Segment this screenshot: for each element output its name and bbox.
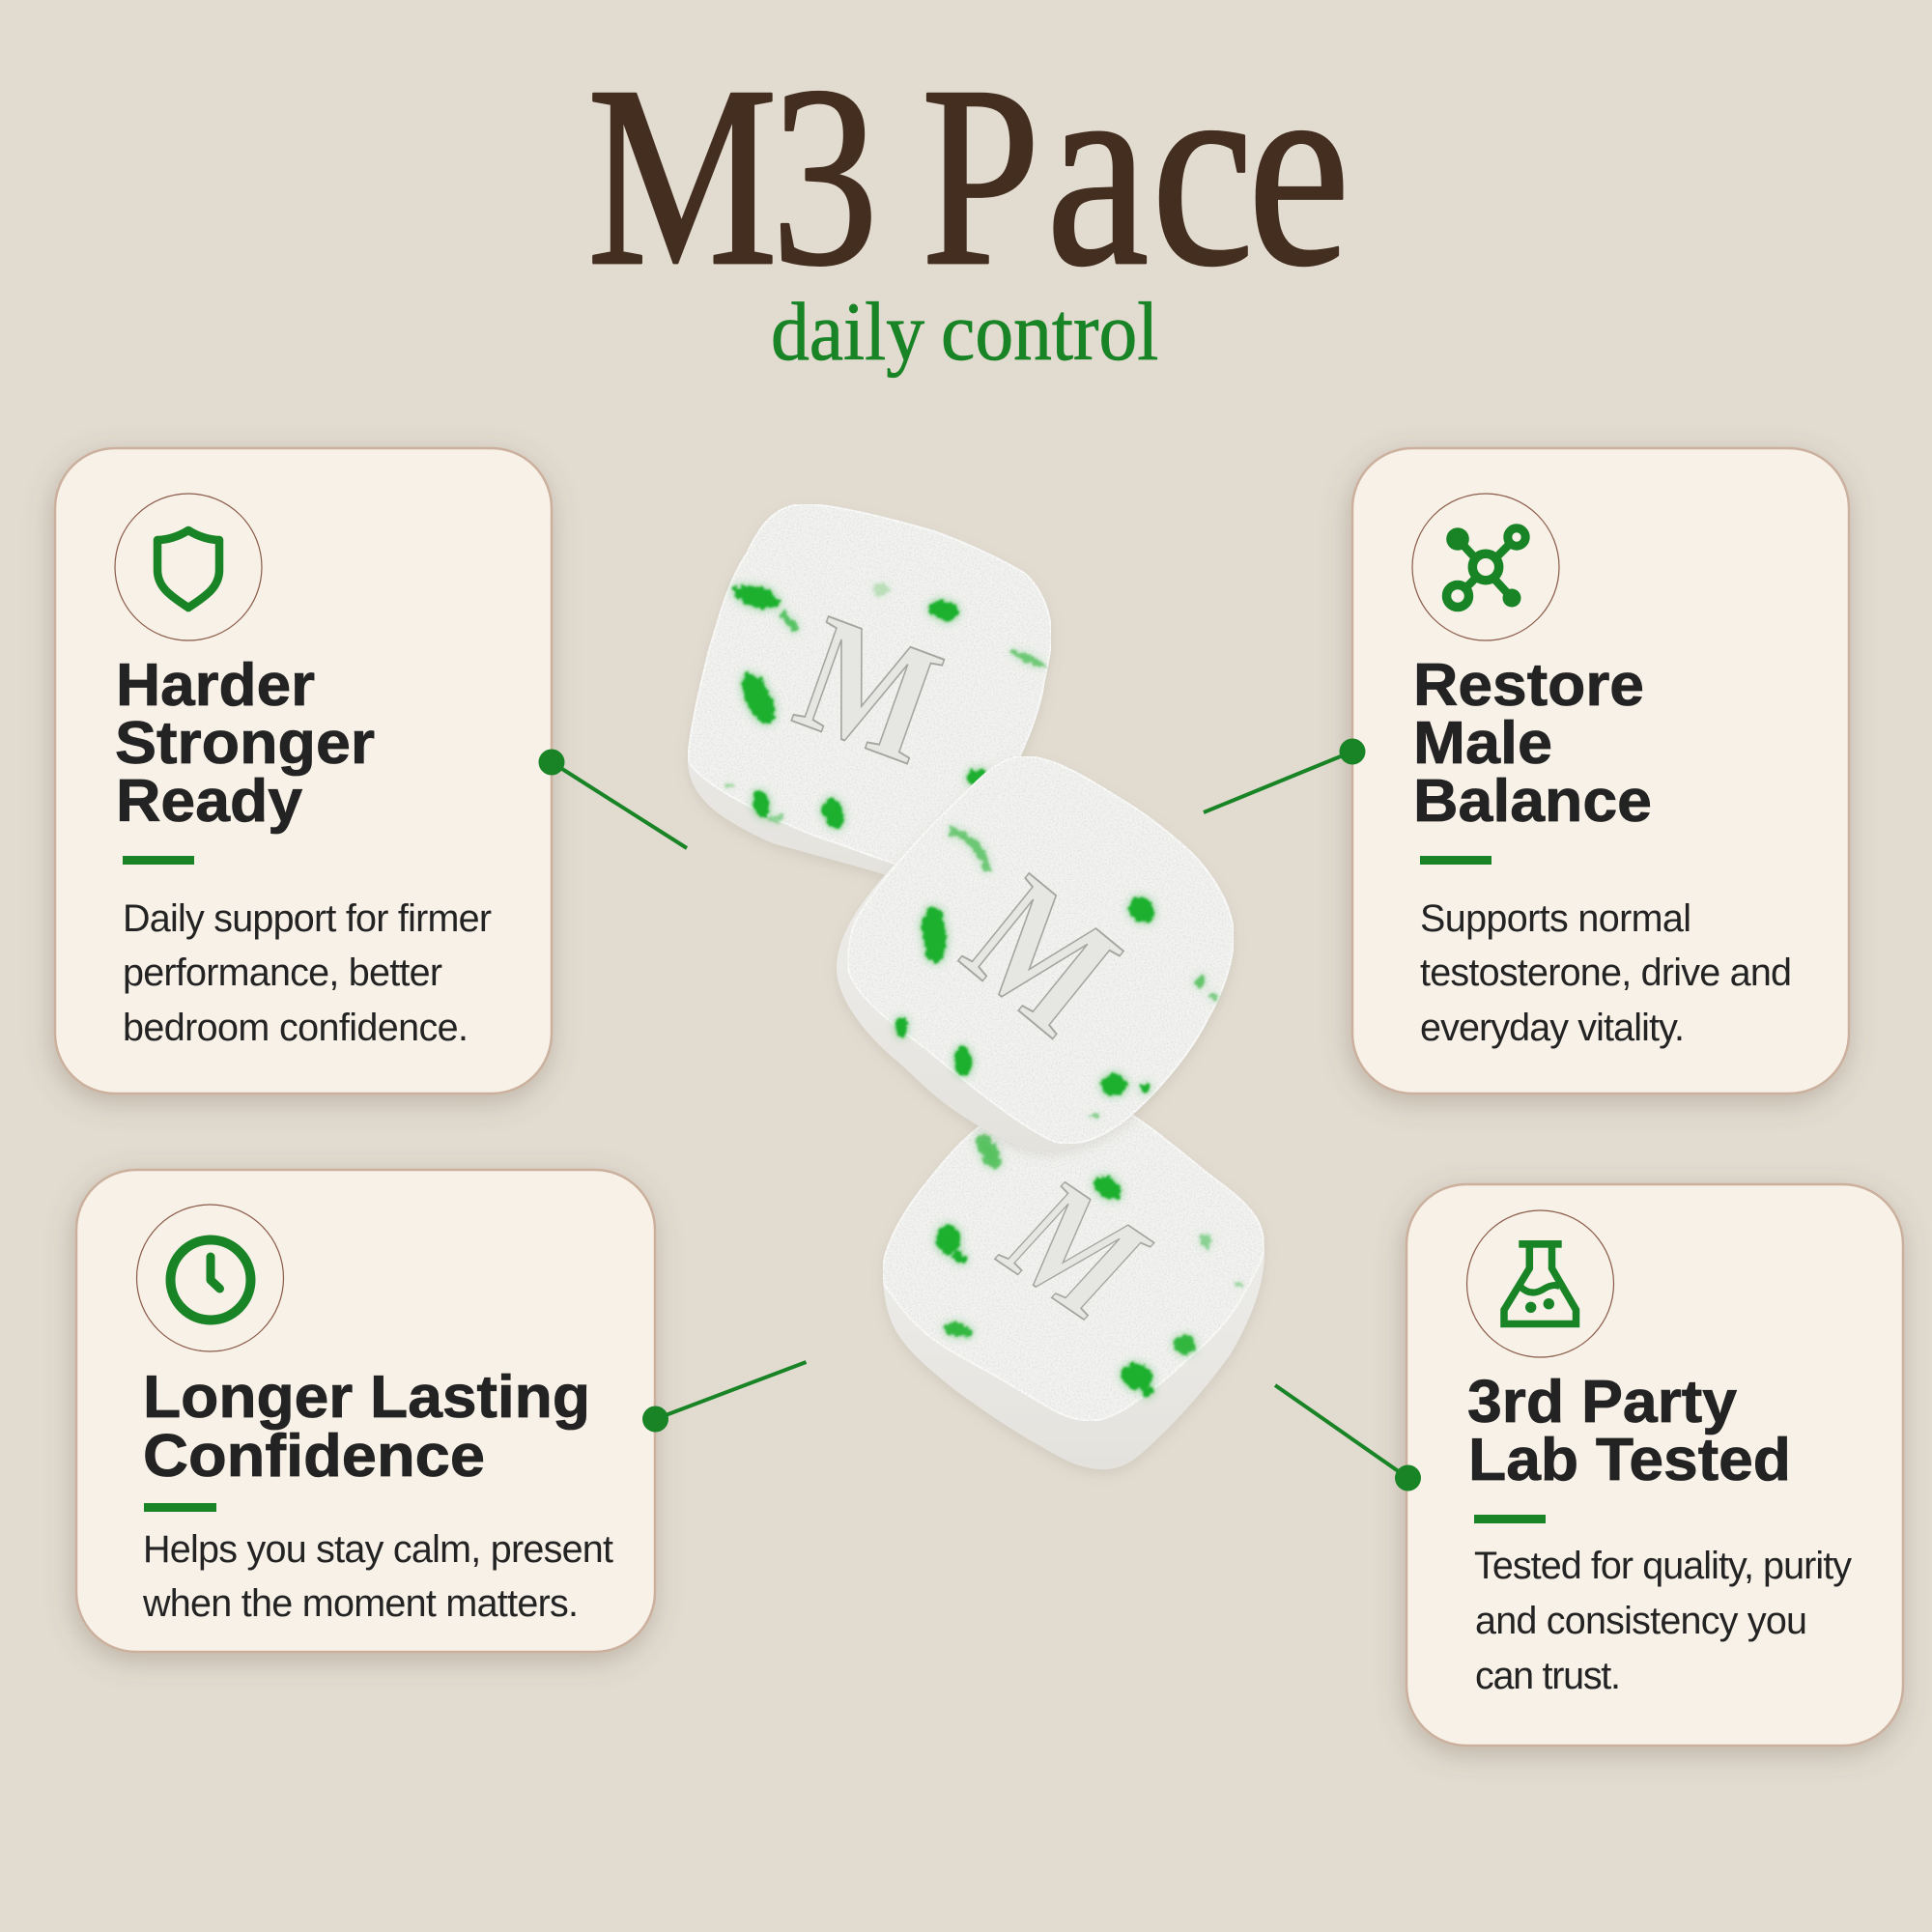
embossed M: M: [970, 1153, 1182, 1348]
body text: can trust.: [1475, 1655, 1621, 1697]
body text: testosterone, drive and: [1420, 952, 1792, 994]
heading: Longer Lasting: [143, 1364, 590, 1431]
body text: when the moment matters.: [142, 1582, 579, 1625]
heading: Harder: [116, 652, 315, 719]
body text: bedroom confidence.: [123, 1007, 469, 1049]
tablet: bottom: [883, 1111, 1264, 1469]
subtitle: daily: [771, 285, 944, 378]
connector: Restore Male Balance: [1204, 738, 1366, 812]
heading: Stronger: [115, 710, 375, 777]
icon: molecule: [1412, 494, 1559, 640]
body text: [1420, 897, 1792, 1049]
heading: 3rd Party: [1467, 1369, 1738, 1435]
heading: Male: [1413, 710, 1552, 777]
title: P: [922, 34, 1040, 320]
connector: 3rd Party Lab Tested: [1275, 1385, 1421, 1492]
icon: clock: [137, 1205, 284, 1351]
heading: Ready: [116, 768, 303, 835]
subtitle: control: [941, 285, 1158, 378]
title: ace: [1046, 15, 1350, 324]
title: M3: [587, 34, 935, 320]
panel: Longer Lasting Confidence: [76, 1170, 655, 1652]
embossed M: M: [777, 579, 961, 800]
panel: Harder Stronger Ready: [55, 448, 552, 1094]
body text: Helps you stay calm, present: [143, 1528, 613, 1571]
tablets illustration: [688, 504, 1264, 1469]
heading: [1413, 652, 1652, 835]
panel: Restore Male Balance: [1352, 448, 1849, 1094]
body text: everyday vitality.: [1420, 1007, 1685, 1049]
body text: [1474, 1545, 1852, 1697]
heading: Balance: [1413, 768, 1652, 835]
heading: [1467, 1369, 1791, 1493]
embossed M: M: [933, 840, 1151, 1070]
body text: [123, 897, 492, 1049]
heading: Restore: [1413, 652, 1644, 719]
connector: Longer Lasting Confidence: [642, 1362, 806, 1432]
heading: [143, 1364, 590, 1490]
body text: performance, better: [123, 952, 442, 994]
icon: flask: [1466, 1210, 1613, 1357]
tablet: middle: [837, 756, 1234, 1151]
heading: [115, 652, 375, 835]
tablet: top: [688, 504, 1051, 884]
body text: and consistency you: [1475, 1600, 1807, 1642]
icon: shield: [115, 494, 262, 640]
heading: Confidence: [143, 1423, 485, 1490]
body text: Daily support for firmer: [123, 897, 492, 940]
body text: Tested for quality, purity: [1474, 1545, 1852, 1587]
heading: Lab Tested: [1468, 1427, 1791, 1493]
body text: [142, 1528, 613, 1625]
panel: 3rd Party Lab Tested: [1406, 1184, 1903, 1746]
body text: Supports normal: [1420, 897, 1691, 940]
connector: Harder Stronger Ready: [539, 750, 687, 848]
